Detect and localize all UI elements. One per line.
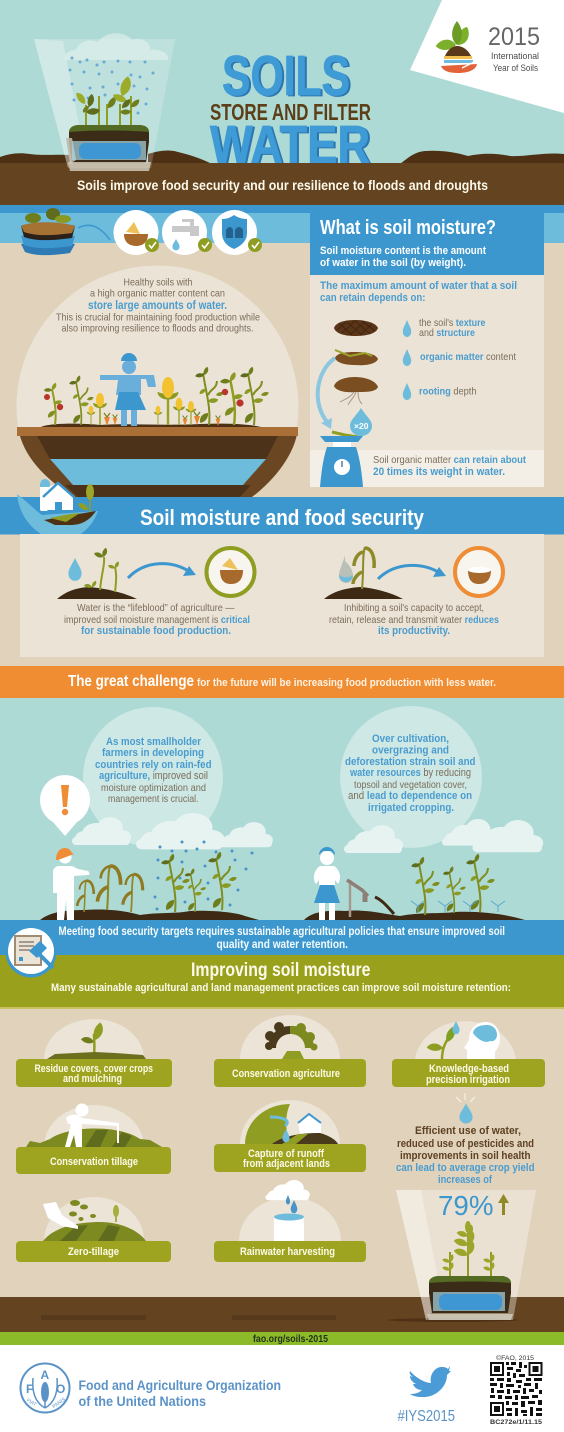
icon: farm house (17, 479, 98, 540)
left text: for sustainable food production. (81, 625, 231, 637)
practice: residue covers (16, 1019, 172, 1087)
logo panel: International Year of Soils 2015: 2015 (488, 23, 540, 51)
icon: drop with rays (456, 1093, 475, 1123)
band: soil footer (0, 1297, 564, 1332)
right text: its productivity. (378, 625, 450, 637)
practice: capture of runoff (214, 1100, 366, 1172)
glass pot with 79 percent (396, 1190, 536, 1320)
soil: left field (40, 909, 259, 920)
right speech bubble: irrigated cropping. (368, 802, 454, 814)
logo panel: International Year of Soils 2015 (410, 0, 564, 113)
FAO logo: A (40, 1368, 50, 1382)
panel: soil bowl circle (16, 265, 298, 497)
panel: what is soil moisture (310, 205, 544, 487)
practice: zero-tillage: Zero-tillage (68, 1246, 119, 1258)
right speech bubble: water resources by reducing (349, 767, 471, 779)
arrow: right (378, 565, 446, 579)
FAO logo (20, 1364, 70, 1412)
FAO name: Food and Agriculture Organization (78, 1377, 281, 1393)
depends on text: The maximum amount of water that a soil (320, 280, 517, 292)
title: WATER (210, 115, 370, 175)
practice: zero-tillage (16, 1197, 171, 1262)
band: food security targets (0, 920, 564, 955)
left speech bubble: countries rely on rain-fed (95, 759, 212, 771)
footer background (0, 1345, 564, 1432)
arrow up (498, 1194, 509, 1215)
circle text: store large amounts of water. (88, 300, 227, 312)
woman watching irrigation (314, 847, 340, 920)
practice: conservation agriculture: Conservation agriculture (232, 1068, 340, 1080)
yield text: increases of (438, 1174, 492, 1186)
organic matter text (373, 454, 526, 478)
band: improving soil moisture (0, 955, 564, 1009)
pot (429, 1276, 511, 1294)
arrow: left (128, 564, 196, 578)
circle text: This is crucial for maintaining food production while (56, 312, 260, 324)
practice: residue covers: Residue covers, cover crops (34, 1063, 153, 1075)
FAO logo: FIAT (25, 1398, 37, 1408)
icon: soil texture (334, 320, 378, 336)
page background: sky header (0, 0, 564, 205)
practice: precision irrigation: precision irrigation (426, 1074, 510, 1086)
soil: right field (304, 911, 525, 920)
title: WATER (212, 116, 372, 176)
right text: Inhibiting a soil's capacity to accept, (344, 602, 484, 614)
band: the great challenge (0, 666, 564, 698)
left speech bubble: agriculture, improved soil (99, 770, 208, 782)
icon: soil organic matter (335, 350, 378, 365)
poor soil moisture: wilted plant (324, 547, 403, 599)
soil line (41, 424, 261, 427)
woman with hoe (100, 353, 156, 426)
yield text: improvements in soil health (400, 1150, 531, 1162)
sprinkler (347, 880, 394, 917)
FAO name: of the United Nations (78, 1393, 206, 1409)
arrow: into scale (318, 358, 335, 429)
practice: precision irrigation: Knowledge-based (429, 1063, 509, 1075)
icon: soil layers (21, 208, 75, 255)
organic matter text: 20 times its weight in water. (373, 466, 505, 478)
organic matter text: Soil organic matter can retain about (373, 454, 526, 466)
icon: twitter bird (410, 1366, 451, 1397)
depends on text (320, 280, 517, 304)
left text (64, 602, 250, 637)
practice: conservation agriculture (214, 1015, 366, 1087)
left speech bubble (83, 707, 223, 847)
title: SOILS (224, 45, 352, 109)
band: website link (0, 1332, 564, 1345)
glass pot with rain and plants (34, 33, 175, 171)
farmer with hat (53, 848, 90, 920)
practice: capture of runoff: from adjacent lands (243, 1158, 330, 1170)
soil band with tagline: Soils improve food security and our resilience to floods and droughts (77, 177, 488, 193)
FAO name (78, 1377, 281, 1409)
list text (419, 317, 516, 398)
right speech bubble: topsoil and vegetation cover, (354, 779, 467, 791)
circle text (56, 276, 260, 334)
drop x20: ×20 (354, 421, 369, 431)
list text: the soil's texture (419, 317, 486, 329)
icon: water tap (162, 210, 212, 255)
right speech bubble: and lead to dependence on (348, 790, 472, 802)
definition text: of water in the soil (by weight). (320, 257, 466, 269)
logo panel: International Year of Soils 2015: International (491, 51, 539, 61)
right text (329, 602, 499, 637)
band: soil moisture and food security (0, 497, 564, 534)
right speech bubble: Over cultivation, (372, 733, 449, 745)
QR code with credits: ©FAO, 2015 (496, 1354, 534, 1362)
bullet drops (403, 320, 411, 400)
practice: rainwater harvesting (214, 1180, 366, 1262)
band: the great challenge: for the future will be increasing food production with less water. (197, 677, 496, 689)
practice: conservation tillage (16, 1104, 171, 1174)
definition text (320, 245, 486, 269)
circle text: also improving resilience to floods and droughts. (62, 322, 254, 334)
list text: organic matter content (420, 351, 516, 363)
icon: full bowl (206, 548, 254, 596)
band: website link: fao.org/soils-2015 (253, 1333, 328, 1345)
right speech bubble: overgrazing and (372, 744, 449, 756)
band: improving soil moisture: Improving soil moisture (191, 960, 370, 981)
band: improving soil moisture: Many sustainable agricultural and land management practices can improve soil moisture retention: (51, 982, 511, 994)
title (210, 44, 372, 176)
irrigated plants (411, 854, 505, 915)
yield text: Efficient use of water, (415, 1125, 521, 1137)
right text: retain, release and transmit water reduces (329, 614, 499, 626)
soil band with tagline (0, 163, 564, 205)
icon: weighing scale (320, 432, 363, 487)
icon: empty bowl (455, 548, 503, 596)
practice: conservation tillage: Conservation tillage (50, 1156, 138, 1168)
icon: shield with family (212, 210, 262, 255)
QR code with credits: BC272e/1/11.15 (490, 1419, 542, 1426)
practice: capture of runoff: Capture of runoff (248, 1148, 324, 1160)
panel: food security (20, 534, 544, 657)
soil hills (0, 151, 564, 164)
FAO logo: O (56, 1382, 65, 1396)
FAO logo: PANIS (51, 1396, 67, 1410)
79 percent: 79% (438, 1190, 494, 1221)
top strip: blue bands (0, 205, 564, 243)
QR code with credits (490, 1354, 542, 1426)
list text: rooting depth (419, 386, 477, 398)
practice: rainwater harvesting: Rainwater harvesting (240, 1246, 335, 1258)
arrow: soil to benefits (78, 225, 110, 240)
left text: Water is the “lifeblood” of agriculture — (77, 602, 235, 614)
left speech bubble: As most smallholder (106, 736, 202, 748)
list text: and structure (419, 327, 475, 339)
FAO logo: F (26, 1382, 33, 1396)
circle text: Healthy soils with (124, 276, 193, 288)
practice: precision irrigation (392, 1021, 545, 1087)
left text: improved soil moisture management is critical (64, 614, 250, 626)
circle text: a high organic matter content can (90, 288, 225, 300)
hashtag: #IYS2015 (398, 1408, 455, 1425)
band: the great challenge: The great challenge (68, 673, 194, 690)
healthy plants in the rain (161, 852, 237, 912)
icon: policy document and gavel (6, 926, 56, 978)
practice: residue covers: and mulching (63, 1073, 122, 1085)
logo panel: International Year of Soils 2015: Year of Soils (493, 63, 538, 73)
rain drops (154, 840, 254, 910)
yield text: reduced use of pesticides and (397, 1138, 534, 1150)
wheat plants (442, 1221, 496, 1277)
exclamation bubble (40, 775, 90, 836)
section background: beige (0, 205, 564, 666)
band: food security targets: quality and water retention. (216, 937, 348, 951)
title: SOILS (222, 44, 350, 108)
title: STORE AND FILTER (210, 99, 371, 125)
left speech bubble: moisture optimization and (101, 782, 206, 794)
section background: practices (0, 1009, 564, 1297)
icon: soil with roots (334, 377, 378, 405)
heading: What is soil moisture? (320, 217, 496, 239)
band: soil moisture and food security: Soil moisture and food security (140, 505, 425, 530)
panel: sky scene (0, 698, 564, 920)
crops (44, 367, 269, 426)
good soil moisture: seedling and bowl (57, 548, 137, 599)
clouds (72, 813, 543, 853)
right speech bubble (340, 706, 482, 848)
left speech bubble: farmers in developing (102, 747, 204, 759)
yield text: can lead to average crop yield (396, 1162, 534, 1174)
depends on text: can retain depends on: (320, 292, 426, 304)
definition text: Soil moisture content is the amount (320, 245, 486, 257)
left speech bubble: management is crucial. (108, 793, 198, 805)
right speech bubble: deforestation strain soil and (345, 756, 476, 768)
wilted plants (77, 866, 143, 912)
yield text (396, 1125, 534, 1186)
drop x20 (350, 408, 372, 436)
icon: food bowl (114, 210, 159, 255)
